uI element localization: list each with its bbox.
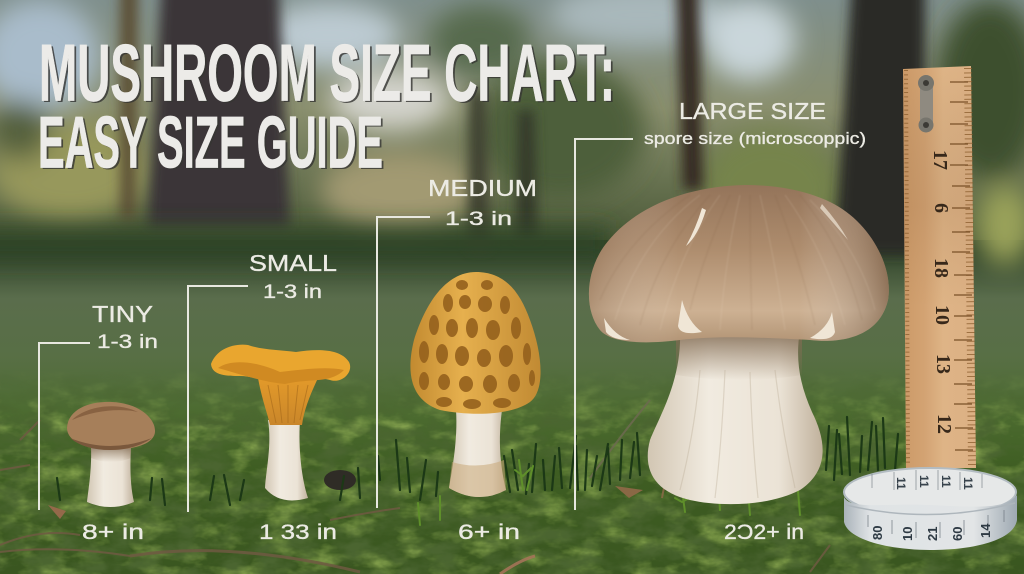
label: small: 1 33 in bbox=[259, 521, 337, 544]
title: EASY SIZE GUIDE bbox=[40, 104, 385, 185]
mushroom: small chanterelle bbox=[211, 345, 350, 500]
measuring tape: 11 bbox=[939, 475, 953, 488]
mushroom: tiny bbox=[67, 402, 155, 507]
label: small: SMALL bbox=[249, 250, 337, 276]
label: large size bbox=[575, 98, 866, 544]
label: tiny: TINY bbox=[92, 301, 153, 327]
label: small: 1-3 in bbox=[263, 282, 322, 303]
ruler: 10 bbox=[931, 305, 953, 325]
label: large size: 2Ɔ2+ in bbox=[724, 521, 804, 544]
measuring tape: 11 bbox=[917, 475, 931, 488]
label: tiny bbox=[39, 301, 158, 544]
label: tiny: 1-3 in bbox=[97, 332, 158, 353]
label: medium: 6+ in bbox=[458, 521, 520, 544]
measuring tape: 80 bbox=[870, 526, 885, 540]
ruler: 13 bbox=[932, 354, 954, 374]
measuring tape bbox=[844, 468, 1017, 550]
title: EASY SIZE GUIDE bbox=[38, 102, 383, 184]
measuring tape: 11 bbox=[961, 477, 975, 490]
measuring tape: 14 bbox=[978, 523, 993, 538]
mushroom: medium morel bbox=[410, 272, 541, 497]
label: large size: spore size (microscoppic) bbox=[644, 129, 866, 148]
ruler: 6 bbox=[930, 203, 952, 213]
ruler: 17 bbox=[929, 150, 951, 170]
label: medium: MEDIUM bbox=[428, 175, 537, 201]
measuring tape: 11 bbox=[894, 477, 908, 490]
mossy foreground bbox=[0, 370, 1024, 574]
ruler: 18 bbox=[930, 258, 952, 278]
mushroom: large porcini bbox=[589, 185, 889, 504]
measuring tape: 21 bbox=[925, 527, 940, 541]
measuring tape: 10 bbox=[900, 527, 915, 541]
label: small bbox=[188, 250, 337, 544]
label: medium bbox=[377, 175, 537, 544]
measuring tape: 60 bbox=[950, 527, 965, 541]
title bbox=[38, 28, 617, 185]
label: medium: 1-3 in bbox=[445, 209, 512, 230]
ruler: 12 bbox=[933, 414, 955, 434]
ruler bbox=[903, 66, 976, 468]
label: large size: LARGE SIZE bbox=[679, 98, 826, 124]
label: tiny: 8+ in bbox=[82, 521, 144, 544]
